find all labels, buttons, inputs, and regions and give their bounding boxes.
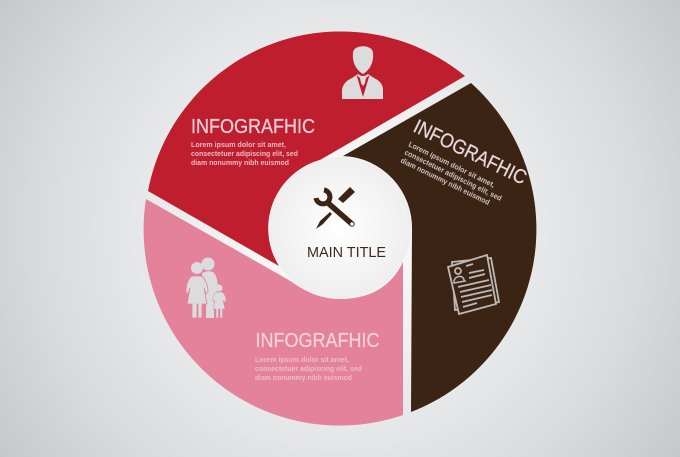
panel: pink segment [144, 199, 403, 426]
heading: pink segment: INFOGRAFHIC [256, 330, 380, 352]
text block: brown segment: Lorem ipsum dolor sit amet, [407, 140, 496, 189]
icon: documents [448, 255, 499, 314]
main title: MAIN TITLE [307, 245, 386, 261]
text block: brown segment: diam nonummy nibh euismod [399, 156, 492, 207]
text block: red segment [191, 140, 298, 167]
text block: pink segment [255, 355, 362, 382]
text block: pink segment: consectetuer adipiscing elit, sed [255, 364, 362, 373]
heading: red segment: INFOGRAFHIC [191, 116, 315, 138]
text block: pink segment: Lorem ipsum dolor sit amet, [255, 355, 349, 364]
panel: red segment [148, 31, 465, 266]
icon: family [186, 258, 226, 318]
text block: red segment: consectetuer adipiscing elit, sed [191, 149, 298, 158]
text block: pink segment: diam nonummy nibh euismod [255, 373, 352, 382]
text block: red segment: diam nonummy nibh euismod [191, 158, 289, 167]
icon: wrench and screwdriver [316, 187, 355, 229]
panel: main title hub [269, 157, 411, 299]
text block: brown segment: consectetuer adipiscing elit, sed [403, 148, 504, 203]
icon: businessman [342, 46, 383, 99]
panel: brown segment [343, 83, 536, 412]
heading: brown segment: INFOGRAFHIC [410, 116, 530, 189]
text block: red segment: Lorem ipsum dolor sit amet, [191, 140, 286, 149]
